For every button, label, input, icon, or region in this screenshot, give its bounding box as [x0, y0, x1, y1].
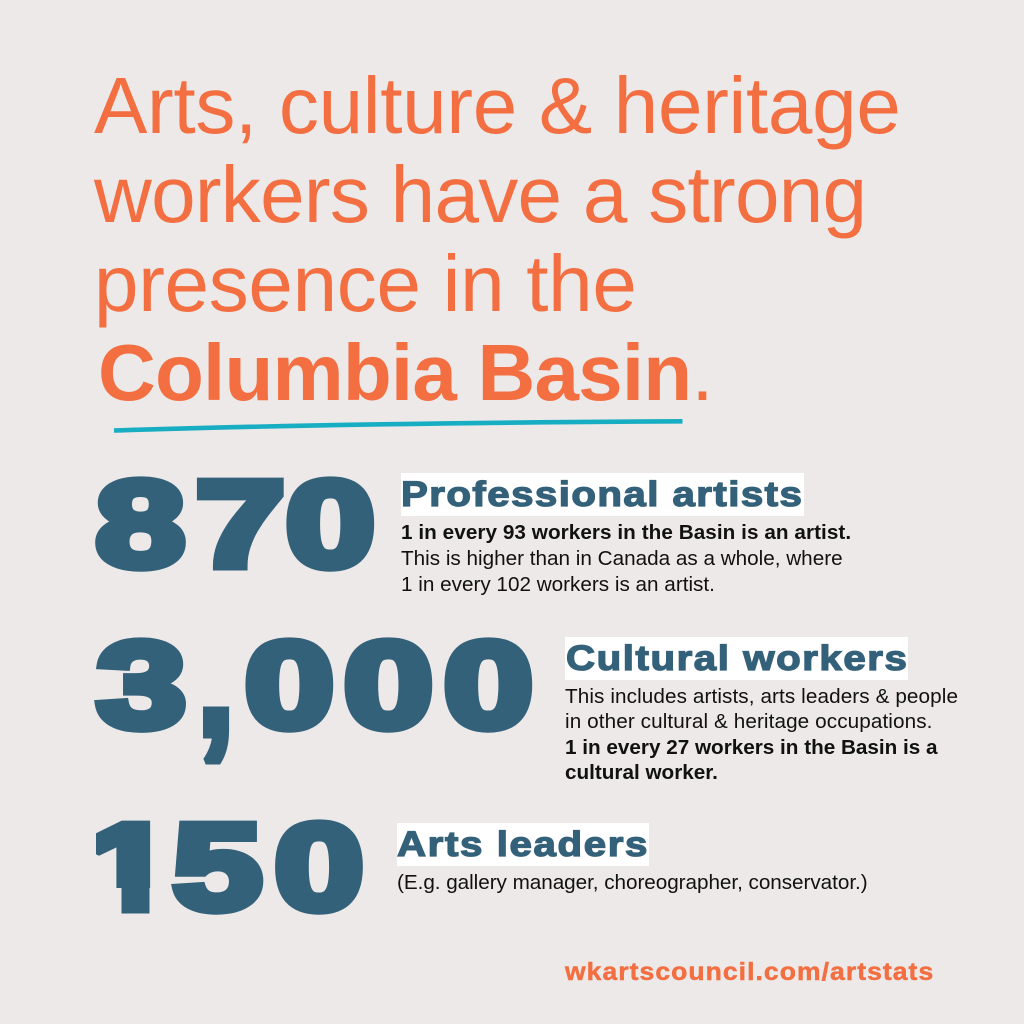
stat: cultural workers [94, 584, 958, 784]
description: cultural workers: This includes artists, arts leaders & people [565, 685, 958, 708]
description: cultural workers: 1 in every 27 workers in the Basin is a [565, 736, 938, 759]
stat: professional artists [95, 456, 851, 596]
number: 150: 1 [85, 799, 174, 936]
title: Columbia Basin. [98, 328, 713, 417]
website link: wkartscouncil.com/artstats [565, 958, 934, 986]
description: cultural workers: in other cultural & heritage occupations. [565, 710, 932, 733]
title [94, 61, 901, 417]
underline accent [114, 419, 682, 433]
description: arts leaders: (E.g. gallery manager, choreographer, conservator.) [397, 871, 868, 894]
description: cultural workers [565, 685, 958, 784]
description: artists: 1 in every 102 workers is an artist. [401, 573, 715, 596]
title: presence in the [94, 239, 637, 328]
number: 3,000 [94, 584, 533, 772]
number: 3,000: , [196, 584, 236, 772]
stat: arts leaders [96, 799, 868, 936]
number: 870: 870 [96, 456, 375, 593]
description: cultural workers: cultural worker. [565, 761, 718, 784]
description: artists: This is higher than in Canada as a whole, where [401, 547, 843, 570]
heading: professional artists: Professional artists [401, 475, 803, 514]
heading: cultural workers: Cultural workers [566, 639, 908, 678]
description: artists: 1 in every 93 workers in the Basin is an artist. [401, 521, 851, 544]
title: workers have a strong [94, 150, 866, 239]
description: artists [401, 521, 851, 596]
number: 3,000: 3 [97, 617, 186, 754]
number: 150: 50 [173, 799, 364, 936]
number: 3,000: 000 [245, 617, 533, 754]
heading: arts leaders: Arts leaders [397, 825, 649, 864]
title: Arts, culture & heritage [94, 61, 901, 150]
